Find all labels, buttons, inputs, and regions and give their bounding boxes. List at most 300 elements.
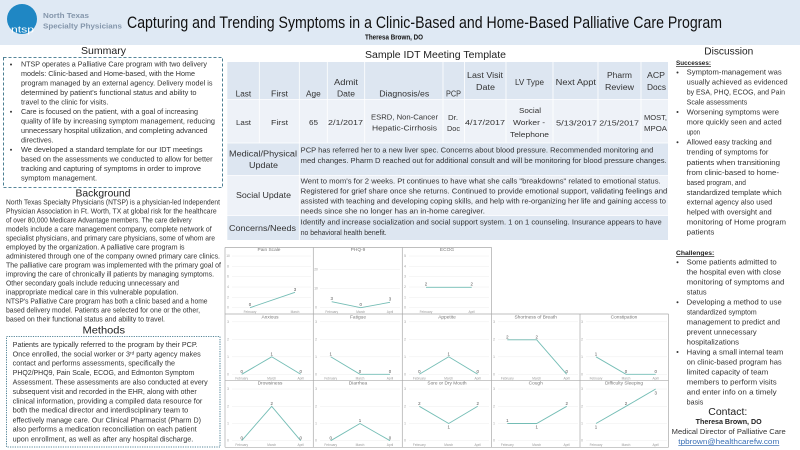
chart: Fatigue: [315, 315, 400, 380]
chart: Drowsiness: 0: [299, 436, 302, 440]
text block: successes: by ESA, PHQ, ECOG, and Pain: [687, 90, 785, 97]
chart: Anxious: 0: [227, 372, 229, 376]
header band: [0, 0, 800, 45]
table header row: Date: [476, 83, 496, 92]
table row: medical update: PCP has referred her to a new liver spec. Concerns about blood pressure. Recommended monitoring and: [301, 147, 653, 154]
chart: Appetite: 1: [404, 355, 406, 359]
chart: Constipation: [581, 315, 667, 380]
table patient row: 2/15/2017: [599, 120, 639, 128]
text block: successes: monitoring of Home program: [687, 220, 786, 227]
text block: challenges: Some patients admitted to: [687, 260, 777, 267]
panel: methods: also performs a medication reconciliation on each patient: [13, 427, 197, 434]
table patient row: Telephone: [510, 132, 549, 139]
panel: methods: both the medical director and interdisciplinary team to: [13, 408, 188, 415]
table header row: Date: [337, 90, 356, 98]
chart: PHQ-9: March: [356, 310, 365, 314]
text block: challenges: the hospital even with close: [687, 270, 781, 277]
text block: successes: trending of symptoms for: [687, 150, 769, 157]
table row: medical update: Update: [249, 161, 279, 170]
table patient row: Social: [519, 108, 541, 115]
table row: social update: Registered for grief share once she returns. Continued to provide emotional support, validating feelings and: [301, 189, 667, 196]
chart: Difficulty Sleeping: February: [590, 443, 603, 447]
chart: ECOG: 2: [425, 282, 428, 286]
chart: Appetite: 0: [418, 369, 421, 374]
table row: social update: Went to mom's for 2 weeks. Pt continues to have what she calls "breakdowns" related to emotional status.: [301, 178, 661, 185]
chart: Pain Scale: March: [291, 310, 300, 314]
table header row: Review: [605, 83, 634, 92]
chart: PHQ-9: 10: [314, 287, 318, 291]
chart: Constipation: 0: [654, 369, 657, 374]
chart: Diarrhea: February: [324, 443, 337, 447]
chart: Difficulty Sleeping: Difficulty Sleeping: [605, 381, 643, 387]
chart: Sore or Dry Mouth: [404, 381, 489, 447]
table patient row: Last: [236, 120, 251, 127]
chart: Shortness of Breath: 3: [493, 320, 495, 324]
panel: methods: PHQ2/PHQ9, Pain Scale, ECOG, and Edmonton Symptom: [13, 370, 194, 377]
chart: Cough: March: [532, 443, 541, 447]
text block: challenges: prevent unnecessary: [687, 330, 757, 337]
text block: background: based delivery model. Patients are selected for one or the other,: [6, 307, 200, 314]
chart: Diarrhea: 0: [389, 436, 392, 440]
panel: summary: models: Clinic-based and Home-based, with the Home: [21, 71, 195, 78]
table header row: [236, 71, 666, 98]
chart: PHQ-9: 3: [330, 296, 333, 301]
table header row: Last Visit: [467, 71, 504, 80]
chart: Diarrhea: 1: [359, 418, 362, 423]
contact: Contact:: [708, 407, 747, 418]
chart: PHQ-9: [314, 247, 400, 314]
chart: Difficulty Sleeping: 0: [581, 439, 583, 443]
chart: Difficulty Sleeping: 2: [625, 401, 628, 406]
chart: ECOG: [404, 247, 489, 314]
text block: challenges: Challenges:: [676, 250, 714, 257]
text block: background: models include a care management company, complete network of: [6, 227, 212, 234]
chart: Appetite: 0: [404, 372, 406, 376]
chart: Diarrhea: 1: [315, 422, 317, 426]
panel: summary: quality of life by increasing symptom management, reducing: [21, 119, 215, 126]
chart: Fatigue: 1: [315, 355, 317, 359]
text block: challenges: Having a small internal team: [687, 349, 783, 356]
panel: summary: determined by patient's functional status and ability to: [21, 90, 197, 97]
chart: Drowsiness: Drowsiness: [258, 381, 283, 387]
panel: summary: unnecessary hospital utilization, and completing advanced: [21, 128, 208, 135]
chart: Drowsiness: 0: [227, 439, 229, 443]
chart: Diarrhea: 2: [315, 404, 317, 408]
text block: challenges: monitoring of symptoms and: [687, 280, 784, 287]
chart: Pain Scale: 10: [226, 254, 230, 258]
panel: methods: clinical information, providing a compiled data resource for: [13, 398, 203, 405]
chart: Shortness of Breath: 0: [565, 369, 568, 374]
author: Theresa Brown, DO: [365, 34, 423, 42]
text block: successes: upon: [687, 130, 700, 137]
chart: Constipation: 3: [581, 320, 583, 324]
text block: challenges: management to predict and: [687, 320, 780, 327]
panel: summary: travel to the clinic for visits.: [21, 99, 109, 106]
text block: challenges: hospitalizations: [687, 340, 740, 347]
charts: symptom trends: [225, 247, 668, 447]
chart: Sore or Dry Mouth: 1: [447, 424, 450, 430]
chart: Sore or Dry Mouth: 1: [404, 422, 406, 426]
chart: Pain Scale: 0: [249, 302, 252, 307]
chart: Fatigue: 0: [359, 369, 362, 374]
table header row: Docs: [647, 83, 666, 92]
chart: Fatigue: 1: [329, 351, 332, 356]
panel: methods: subsequent visit and recorded in the EHR, along with other: [13, 389, 197, 396]
chart: ECOG: 3: [404, 275, 406, 279]
heading: IDT template: Sample IDT Meeting Template: [365, 50, 506, 61]
chart: ECOG: 4: [404, 264, 406, 268]
chart: Fatigue: April: [387, 376, 393, 380]
chart: Shortness of Breath: 2: [535, 334, 538, 339]
panel: summary: tracking and capturing of symptoms in order to improve: [21, 166, 201, 173]
chart: Anxious: [227, 315, 311, 380]
chart: Pain Scale: 3: [294, 287, 297, 292]
chart: Cough: Cough: [529, 381, 543, 387]
text block: challenges: status: [687, 290, 707, 297]
text block: successes: Worsening symptoms were: [687, 109, 779, 116]
table row: social update: [236, 178, 667, 216]
chart: Fatigue: 3: [315, 320, 317, 324]
chart: Cough: 1: [535, 424, 538, 430]
panel: methods: rd: [130, 350, 135, 355]
chart: Cough: 2: [493, 404, 495, 408]
text block: successes: Successes:: [676, 60, 711, 67]
chart: Difficulty Sleeping: [581, 381, 667, 447]
chart: PHQ-9: 0: [315, 306, 317, 310]
text block: successes: Allowed easy tracking and: [687, 140, 772, 147]
chart: ECOG: 1: [404, 295, 406, 299]
chart: Appetite: 3: [404, 320, 406, 324]
chart: Sore or Dry Mouth: April: [475, 443, 481, 447]
table row: concerns: [229, 219, 662, 237]
table header row: Last: [236, 90, 252, 98]
table row: medical update: Medical/Physical: [229, 150, 297, 159]
text block: successes: external agency also used: [687, 200, 772, 207]
table row: concerns: Identify and increase socialization and social support system. 1 on 1 counseling. Insurance appears to have: [301, 219, 662, 226]
chart: Sore or Dry Mouth: 3: [404, 387, 406, 391]
table row: concerns: no behavioral health benefit.: [301, 230, 387, 237]
table patient row: MPOA: [644, 126, 667, 133]
text block: background: inappropriate medical care in this vulnerable population.: [6, 289, 179, 296]
text block: successes: based program, and: [687, 180, 746, 187]
chart: Diarrhea: 0: [315, 439, 317, 443]
table header row: First: [271, 90, 289, 98]
panel: summary: program managed by an external agency. Delivery model is: [21, 81, 213, 88]
chart: PHQ-9: 3: [389, 296, 392, 302]
chart: ECOG: 5: [404, 254, 406, 258]
chart: Fatigue: 0: [315, 372, 317, 376]
table patient row: 5/13/2017: [556, 120, 597, 128]
chart: Anxious: March: [267, 376, 276, 380]
chart: Pain Scale: 8: [227, 264, 229, 268]
panel: summary: directives.: [21, 138, 54, 145]
text block: successes: more quickly seen and acted: [687, 120, 782, 127]
contact: Theresa Brown, DO: [696, 419, 762, 426]
logo wordmark: North Texas: [43, 11, 89, 20]
chart: Cough: 0: [493, 439, 495, 443]
chart: PHQ-9: 20: [314, 267, 318, 271]
contact: [672, 407, 786, 446]
text block: background: administered through one of the company owned primary care clinics.: [6, 253, 220, 260]
chart: Shortness of Breath: 2: [506, 334, 509, 339]
chart: Difficulty Sleeping: 2: [581, 404, 583, 408]
chart: Difficulty Sleeping: 1: [581, 422, 583, 426]
chart: Diarrhea: 0: [329, 436, 332, 440]
chart: Fatigue: Fatigue: [350, 315, 366, 321]
chart: Shortness of Breath: [493, 315, 578, 380]
chart: Anxious: 2: [227, 337, 229, 341]
chart: PHQ-9: April: [387, 310, 393, 314]
chart: Pain Scale: February: [244, 310, 257, 314]
panel: methods: party agency makes: [134, 351, 201, 358]
text block: successes: [676, 60, 788, 237]
chart: Constipation: 2: [581, 337, 583, 341]
chart: Cough: April: [564, 443, 570, 447]
table patient row: MOST,: [644, 115, 667, 122]
chart: Anxious: Anxious: [261, 315, 279, 321]
chart: Anxious: 1: [270, 351, 273, 356]
chart: Pain Scale: 0: [227, 306, 229, 310]
chart: Appetite: 0: [476, 369, 479, 374]
chart: Diarrhea: Diarrhea: [349, 381, 368, 387]
chart: PHQ-9: 0: [359, 302, 362, 307]
chart: Constipation: February: [590, 376, 603, 380]
chart: Sore or Dry Mouth: 2: [418, 401, 421, 406]
text block: successes: helped with oversight and: [687, 210, 772, 217]
table patient row: 65: [309, 120, 318, 127]
panel: summary: based on the assessments we conducted to allow for better: [21, 157, 213, 164]
chart: Sore or Dry Mouth: March: [444, 443, 453, 447]
heading: methods: Methods: [82, 325, 125, 337]
chart: Sore or Dry Mouth: Sore or Dry Mouth: [427, 381, 467, 387]
icon: ntsp logo: [7, 4, 37, 36]
table header row: LV Type: [515, 78, 545, 87]
panel: summary: symptom management.: [21, 176, 97, 183]
chart: ECOG: April: [469, 310, 475, 314]
logo wordmark: Specialty Physicians: [43, 22, 122, 30]
table patient row: 4/17/2017: [465, 120, 505, 127]
chart: Appetite: 2: [404, 337, 406, 341]
table patient row: ESRD, Non-Cancer: [371, 114, 439, 122]
chart: ECOG: 2: [470, 282, 473, 286]
chart: Difficulty Sleeping: April: [653, 443, 659, 447]
text block: background: based on their functional status and ability to travel.: [6, 316, 165, 323]
chart: PHQ-9: February: [325, 310, 338, 314]
contact: Medical Director of Palliative Care: [672, 429, 786, 436]
table header row: ACP: [647, 71, 665, 80]
panel: summary: NTSP operates a Palliative Care program with two delivery: [21, 62, 208, 69]
chart: Cough: 1: [493, 422, 495, 426]
chart: Sore or Dry Mouth: February: [413, 443, 426, 447]
chart: Drowsiness: 3: [227, 387, 229, 391]
text block: challenges: members to perform visits: [687, 380, 777, 387]
chart: Appetite: March: [444, 376, 453, 380]
chart: Shortness of Breath: 2: [493, 337, 495, 341]
chart: Fatigue: March: [356, 376, 365, 380]
panel: summary: Care is focused on the patient, with a goal of increasing: [21, 109, 198, 116]
chart: Drowsiness: [227, 381, 311, 447]
text block: background: [6, 200, 221, 323]
table header row: Age: [306, 90, 321, 98]
chart: Diarrhea: 3: [315, 387, 317, 391]
chart: Difficulty Sleeping: 1: [595, 424, 598, 430]
chart: Shortness of Breath: Shortness of Breath: [514, 315, 557, 321]
text block: background: Other secondary goals include reducing unnecessary and: [6, 280, 179, 287]
chart: Difficulty Sleeping: 3: [581, 387, 583, 391]
chart: Anxious: 3: [227, 320, 229, 324]
table header row: PCP: [446, 90, 461, 98]
chart: Constipation: 0: [625, 369, 628, 374]
chart: Fatigue: 0: [389, 369, 392, 374]
panel: methods: contact and performs assessments, specifically the: [13, 361, 175, 368]
heading: discussion: Discussion: [704, 46, 753, 58]
chart: Pain Scale: 4: [227, 285, 229, 289]
chart: Difficulty Sleeping: 3: [654, 390, 657, 396]
table header row: Diagnosis/es: [379, 90, 429, 98]
chart: Anxious: April: [298, 376, 304, 380]
chart: Drowsiness: 2: [270, 401, 273, 406]
chart: Shortness of Breath: 1: [493, 355, 495, 359]
table patient row: [236, 108, 667, 139]
table row: social update: needs since she no longer has an in-home caregiver.: [301, 209, 485, 216]
table patient row: First: [271, 120, 288, 127]
chart: Appetite: April: [475, 376, 481, 380]
chart: Shortness of Breath: March: [532, 376, 541, 380]
text block: successes: from clinic-based to home-: [687, 170, 780, 177]
chart: Shortness of Breath: 0: [493, 372, 495, 376]
text block: successes: standardized template which: [687, 190, 782, 197]
chart: ECOG: 0: [404, 306, 406, 310]
chart: Drowsiness: March: [267, 443, 276, 447]
chart: Constipation: 1: [595, 351, 598, 356]
chart: Constipation: Constipation: [611, 315, 638, 321]
panel: methods: Once enrolled, the social worker or 3: [13, 351, 127, 358]
chart: Sore or Dry Mouth: 2: [476, 401, 479, 406]
chart: Sore or Dry Mouth: 0: [404, 439, 406, 443]
chart: Fatigue: 2: [315, 337, 317, 341]
chart: Diarrhea: March: [356, 443, 365, 447]
chart: Cough: 3: [493, 387, 495, 391]
chart: Shortness of Breath: February: [501, 376, 514, 380]
panel: methods: Patients are typically referred to the program by their PCP.: [13, 342, 198, 349]
text block: background: specialist physicians, and primary care physicians, some of whom are: [6, 236, 215, 243]
contact: tpbrown@healthcarefw.com: [678, 439, 779, 446]
panel: methods: upon enrollment, as well as after any hospital discharge.: [13, 437, 193, 444]
text block: background: NTSP's Palliative Care program has both a clinic based and a home: [6, 298, 208, 305]
chart: Drowsiness: 2: [227, 404, 229, 408]
chart: Anxious: 0: [240, 369, 243, 374]
chart: Anxious: 1: [227, 355, 229, 359]
text block: challenges: on clinic-based program has: [687, 359, 782, 366]
table row: concerns: Concerns/Needs: [229, 224, 296, 233]
text block: successes: patients: [687, 230, 715, 237]
chart: Difficulty Sleeping: March: [622, 443, 631, 447]
chart: Anxious: 0: [299, 369, 302, 374]
chart: Constipation: April: [653, 376, 659, 380]
chart: Diarrhea: [315, 381, 400, 447]
heading: background: Background: [76, 188, 131, 200]
text block: challenges: Developing a method to use: [687, 300, 782, 307]
chart: Shortness of Breath: April: [564, 376, 570, 380]
chart: Appetite: 1: [447, 351, 450, 356]
table header row: Pharm: [607, 71, 632, 80]
text block: background: employed by the organization. A palliative care program is: [6, 244, 185, 251]
table row: social update: assisted with teaching and developing coping skills, and help with re-organizing her life and gaining access to: [301, 199, 666, 206]
text block: background: of over 80,000 Medicare Advantage members. The care delivery: [6, 218, 192, 225]
table patient row: Doc: [447, 126, 461, 133]
chart: Drowsiness: April: [298, 443, 304, 447]
chart: Appetite: Appetite: [438, 315, 456, 321]
text block: background: improving the care of chronically ill patients by managing symptoms.: [6, 271, 214, 278]
chart: ECOG: ECOG: [440, 247, 454, 253]
table patient row: Dr.: [448, 115, 458, 122]
text block: successes: patients when transitioning: [687, 160, 780, 167]
chart: Pain Scale: Pain Scale: [258, 247, 281, 253]
icon: ntsp logo: ntsp: [11, 24, 34, 36]
text block: challenges: limited capacity of team: [687, 370, 768, 377]
table patient row: Worker -: [513, 120, 546, 127]
chart: Drowsiness: February: [235, 443, 248, 447]
chart: Pain Scale: 6: [227, 275, 229, 279]
chart: Drowsiness: 0: [240, 436, 243, 440]
chart: Appetite: February: [413, 376, 426, 380]
chart: Constipation: March: [622, 376, 631, 380]
text block: challenges: standardized symptom: [687, 310, 757, 317]
chart: Diarrhea: April: [387, 443, 393, 447]
text block: background: The palliative care program was implemented with the primary goal of: [6, 262, 221, 269]
chart: Cough: February: [501, 443, 514, 447]
table row: social update: Social Update: [236, 191, 292, 200]
panel: summary: [4, 58, 222, 188]
text block: successes: Symptom-management was: [687, 70, 782, 77]
panel: methods: [6, 336, 220, 447]
chart: Constipation: 0: [581, 372, 583, 376]
text block: successes: usually achieved as evidenced: [687, 80, 788, 87]
table: sample IDT meeting template: [227, 62, 668, 240]
chart: ECOG: February: [420, 310, 433, 314]
text block: background: Physician Association in Ft. Worth, TX at global risk for the healthcare: [6, 209, 217, 216]
chart: Cough: 1: [506, 418, 509, 423]
logo wordmark: [43, 11, 122, 30]
chart: Pain Scale: [226, 247, 311, 314]
chart: Sore or Dry Mouth: 2: [404, 404, 406, 408]
table patient row: Hepatic-Cirrhosis: [372, 126, 438, 133]
panel: methods: Assessment. These assessments are also conducted at every: [13, 380, 208, 387]
chart: Pain Scale: 2: [227, 295, 229, 299]
chart: Drowsiness: 1: [227, 422, 229, 426]
chart: ECOG: 2: [404, 285, 406, 289]
table header row: Admit: [334, 78, 359, 87]
text block: background: North Texas Specialty Physicians (NTSP) is a physician-led Independent: [6, 200, 220, 207]
table header row: Next Appt: [556, 78, 597, 87]
chart: Cough: [493, 381, 578, 447]
table row: medical update: med changes. Pharm D reached out for additional consult and will be monitoring for blood pressure changes.: [301, 158, 667, 165]
chart: Cough: 2: [565, 401, 568, 406]
table row: medical update: [229, 147, 667, 170]
chart: Constipation: 1: [581, 355, 583, 359]
text block: challenges: basis: [687, 400, 704, 407]
chart: Appetite: [404, 315, 489, 380]
chart: Fatigue: February: [324, 376, 337, 380]
panel: summary: We developed a standard template for our IDT meetings: [21, 147, 203, 154]
chart: Anxious: February: [235, 376, 248, 380]
text block: challenges: and enter info on a timely: [687, 390, 777, 397]
heading: summary: Summary: [81, 45, 127, 57]
chart: PHQ-9: PHQ-9: [351, 247, 366, 253]
text block: successes: Scale assessments: [687, 99, 748, 106]
table patient row: 2/1/2017: [328, 120, 363, 127]
panel: methods: effectively manage care. Our Clinical Pharmacist (Pharm D): [13, 417, 201, 424]
